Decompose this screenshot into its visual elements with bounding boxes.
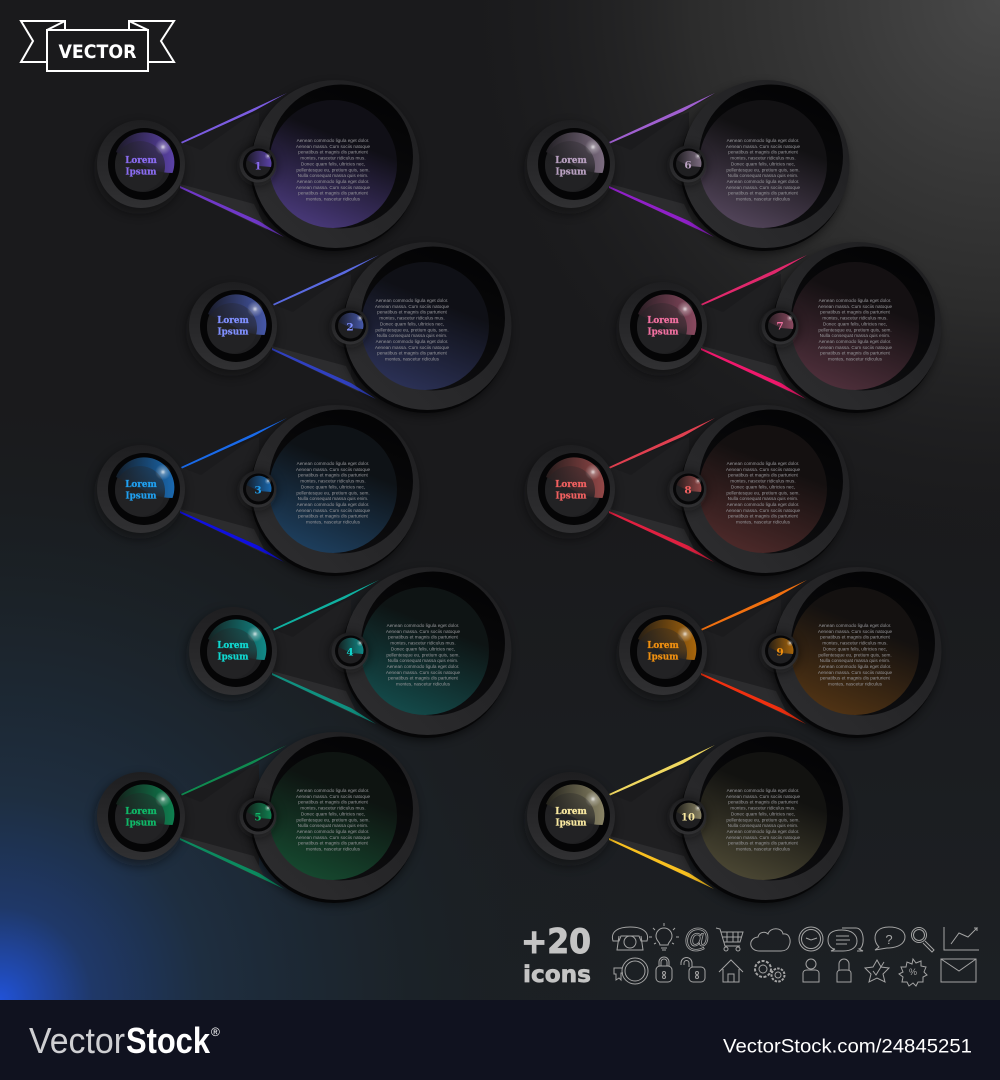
icon: unlocked padlock xyxy=(681,958,705,982)
step 9: orange: montes, nascetur ridiculus xyxy=(828,681,883,686)
step 10: yellow: Aenean massa. Cum sociis natoque xyxy=(726,794,801,799)
step 5: green: Ipsum xyxy=(126,818,157,828)
step 4: teal: 4 xyxy=(346,646,354,658)
icon: chat bubbles xyxy=(828,928,863,951)
step 1: purple: Donec quam felis, ultricies nec, xyxy=(301,161,365,166)
step 1: purple: Ipsum xyxy=(126,168,157,178)
logo: VectorStock: ® xyxy=(211,1025,220,1039)
step 8: red: 8 xyxy=(684,484,692,496)
step 10: yellow: 10 xyxy=(681,812,695,824)
step 7: pink: Aenean commodo ligula eget dolor. xyxy=(819,339,891,344)
step 4: teal: Lorem xyxy=(217,641,249,651)
step 6: violet: Aenean commodo ligula eget dolor. xyxy=(727,138,799,143)
step 10: yellow: Ipsum xyxy=(556,818,587,828)
step 7: pink xyxy=(616,242,942,415)
logo: VectorStock: Stock xyxy=(126,1020,211,1061)
step 1: purple: Aenean massa. Cum sociis natoque xyxy=(296,144,371,149)
step 3: blue: penatibus et magnis dis parturient xyxy=(298,473,369,478)
step 7: pink: montes, nascetur ridiculus mus. xyxy=(822,316,888,321)
step 1: purple: Lorem xyxy=(125,156,157,166)
step 4: teal: Aenean commodo ligula eget dolor. xyxy=(387,623,459,628)
step 7: pink: Lorem xyxy=(647,316,679,326)
step 10: yellow: Aenean massa. Cum sociis natoque xyxy=(726,835,801,840)
step 1: purple: Aenean massa. Cum sociis natoque xyxy=(296,185,371,190)
step 2: periwinkle: penatibus et magnis dis parturient xyxy=(377,351,448,356)
step 6: violet: Aenean commodo ligula eget dolor. xyxy=(727,179,799,184)
icon: cloud xyxy=(751,929,790,951)
step 9: orange xyxy=(616,567,942,740)
step 3: blue: montes, nascetur ridiculus mus. xyxy=(300,479,366,484)
step 2: periwinkle xyxy=(186,242,512,415)
step 6: violet xyxy=(524,80,850,253)
step 10: yellow: montes, nascetur ridiculus mus. xyxy=(730,806,796,811)
step 4: teal: montes, nascetur ridiculus xyxy=(396,681,451,686)
step 10: yellow: Nulla consequat massa quis enim. xyxy=(728,823,798,828)
step 2: periwinkle: montes, nascetur ridiculus mus. xyxy=(379,316,445,321)
step 1: purple: Aenean commodo ligula eget dolor. xyxy=(297,138,369,143)
step 9: orange: penatibus et magnis dis parturient xyxy=(820,635,891,640)
step 9: orange: Aenean commodo ligula eget dolor. xyxy=(819,623,891,628)
step 6: violet: Aenean massa. Cum sociis natoque xyxy=(726,144,801,149)
icon: man xyxy=(803,959,819,982)
step 9: orange: Donec quam felis, ultricies nec, xyxy=(823,646,887,651)
step 7: pink: Aenean massa. Cum sociis natoque xyxy=(818,345,893,350)
step 3: blue: pellentesque eu, pretium quis, sem. xyxy=(296,490,370,495)
icon: discount badge xyxy=(899,959,927,986)
step 8: red: Ipsum xyxy=(556,492,587,502)
step 6: violet: Ipsum xyxy=(556,168,587,178)
step 3: blue: Aenean commodo ligula eget dolor. xyxy=(297,502,369,507)
step 7: pink: pellentesque eu, pretium quis, sem. xyxy=(818,327,892,332)
step 8: red: Aenean massa. Cum sociis natoque xyxy=(726,467,801,472)
step 5: green xyxy=(94,732,420,905)
step 9: orange: 9 xyxy=(776,646,784,658)
step 3: blue: Aenean commodo ligula eget dolor. xyxy=(297,461,369,466)
step 3: blue: Aenean massa. Cum sociis natoque xyxy=(296,508,371,513)
icon: shopping cart xyxy=(716,928,743,951)
icon: gears xyxy=(755,961,784,982)
step 6: violet: Nulla consequat massa quis enim. xyxy=(728,173,798,178)
heading: +20 icons xyxy=(521,922,591,988)
step 5: green: pellentesque eu, pretium quis, sem. xyxy=(296,817,370,822)
badge: VECTOR ribbon: VECTOR xyxy=(58,41,137,63)
step 9: orange: penatibus et magnis dis parturient xyxy=(820,676,891,681)
step 1: purple: Nulla consequat massa quis enim. xyxy=(298,173,368,178)
step 7: pink: penatibus et magnis dis parturient xyxy=(820,310,891,315)
step 7: pink: Donec quam felis, ultricies nec, xyxy=(823,321,887,326)
icon: star with tick xyxy=(865,960,889,982)
step 8: red: penatibus et magnis dis parturient xyxy=(728,514,799,519)
step 1: purple: Aenean commodo ligula eget dolor. xyxy=(297,179,369,184)
step 3: blue: 3 xyxy=(254,484,262,496)
step 8: red: montes, nascetur ridiculus mus. xyxy=(730,479,796,484)
step 4: teal: Nulla consequat massa quis enim. xyxy=(388,658,458,663)
icon: light bulb xyxy=(649,923,679,950)
step 8: red: Lorem xyxy=(555,480,587,490)
step 6: violet: penatibus et magnis dis parturient xyxy=(728,150,799,155)
step 9: orange: pellentesque eu, pretium quis, sem. xyxy=(818,652,892,657)
step 10: yellow xyxy=(524,732,850,905)
step 8: red: Donec quam felis, ultricies nec, xyxy=(731,484,795,489)
step 5: green: penatibus et magnis dis parturient xyxy=(298,800,369,805)
step 1: purple: 1 xyxy=(254,160,262,172)
step 5: green: 5 xyxy=(254,812,262,824)
step 8: red: montes, nascetur ridiculus xyxy=(736,519,791,524)
step 2: periwinkle: Aenean commodo ligula eget dolor. xyxy=(376,339,448,344)
step 6: violet: 6 xyxy=(684,160,692,172)
icon: envelope xyxy=(941,959,976,982)
step 9: orange: montes, nascetur ridiculus mus. xyxy=(822,641,888,646)
step 3: blue: montes, nascetur ridiculus xyxy=(306,519,361,524)
step 5: green: Lorem xyxy=(125,807,157,817)
step 6: violet: montes, nascetur ridiculus mus. xyxy=(730,156,796,161)
step 7: pink: Aenean massa. Cum sociis natoque xyxy=(818,304,893,309)
step 2: periwinkle: Aenean massa. Cum sociis natoque xyxy=(375,304,450,309)
step 9: orange: Nulla consequat massa quis enim. xyxy=(820,658,890,663)
step 4: teal: Aenean massa. Cum sociis natoque xyxy=(386,670,461,675)
step 9: orange: Lorem xyxy=(647,641,679,651)
step 9: orange: Aenean massa. Cum sociis natoque xyxy=(818,629,893,634)
step 4: teal: montes, nascetur ridiculus mus. xyxy=(390,641,456,646)
step 3: blue: Ipsum xyxy=(126,492,157,502)
step 10: yellow: Aenean commodo ligula eget dolor. xyxy=(727,829,799,834)
step 6: violet: penatibus et magnis dis parturient xyxy=(728,191,799,196)
step 10: yellow: Lorem xyxy=(555,807,587,817)
step 5: green: Aenean massa. Cum sociis natoque xyxy=(296,835,371,840)
step 1: purple: pellentesque eu, pretium quis, sem. xyxy=(296,167,370,172)
step 4: teal: pellentesque eu, pretium quis, sem. xyxy=(386,652,460,657)
step 2: periwinkle: penatibus et magnis dis parturient xyxy=(377,310,448,315)
step 2: periwinkle: pellentesque eu, pretium quis, sem. xyxy=(375,327,449,332)
step 3: blue: Aenean massa. Cum sociis natoque xyxy=(296,467,371,472)
step 2: periwinkle: Lorem xyxy=(217,316,249,326)
logo: VectorStock xyxy=(29,1020,220,1061)
logo: VectorStock: Vector xyxy=(29,1020,125,1061)
step 8: red xyxy=(524,405,850,578)
step 2: periwinkle: Ipsum xyxy=(218,328,249,338)
step 3: blue: Nulla consequat massa quis enim. xyxy=(298,496,368,501)
icon: line chart xyxy=(944,927,979,950)
step 4: teal: penatibus et magnis dis parturient xyxy=(388,635,459,640)
step 5: green: Aenean commodo ligula eget dolor. xyxy=(297,829,369,834)
step 8: red: pellentesque eu, pretium quis, sem. xyxy=(726,490,800,495)
step 4: teal xyxy=(186,567,512,740)
step 1: purple xyxy=(94,80,420,253)
icon: question bubble xyxy=(875,927,905,950)
heading: +20 icons: +20 xyxy=(521,922,591,962)
step 6: violet: pellentesque eu, pretium quis, sem. xyxy=(726,167,800,172)
step 7: pink: 7 xyxy=(776,320,784,332)
heading: +20 icons: icons xyxy=(523,962,591,988)
icon: magnifier xyxy=(912,928,934,952)
step 7: pink: montes, nascetur ridiculus xyxy=(828,356,883,361)
icon: question bubble: ? xyxy=(885,932,893,947)
step 2: periwinkle: Aenean commodo ligula eget dolor. xyxy=(376,298,448,303)
step 5: green: Aenean massa. Cum sociis natoque xyxy=(296,794,371,799)
step 10: yellow: montes, nascetur ridiculus xyxy=(736,846,791,851)
step 10: yellow: Aenean commodo ligula eget dolor. xyxy=(727,788,799,793)
step 2: periwinkle: 2 xyxy=(346,322,354,334)
step 8: red: Aenean commodo ligula eget dolor. xyxy=(727,461,799,466)
step 6: violet: Lorem xyxy=(555,156,587,166)
step 8: red: Nulla consequat massa quis enim. xyxy=(728,496,798,501)
icon: at sign: @ xyxy=(684,923,710,953)
step 4: teal: Ipsum xyxy=(218,652,249,662)
step 9: orange: Ipsum xyxy=(648,652,679,662)
step 3: blue: Donec quam felis, ultricies nec, xyxy=(301,484,365,489)
step 5: green: montes, nascetur ridiculus mus. xyxy=(300,806,366,811)
step 3: blue xyxy=(94,405,420,578)
step 5: green: penatibus et magnis dis parturient xyxy=(298,841,369,846)
badge: VECTOR ribbon xyxy=(21,21,174,71)
icon set xyxy=(612,923,979,986)
icon: house xyxy=(719,960,743,982)
icon: telephone xyxy=(612,927,648,950)
step 10: yellow: penatibus et magnis dis parturient xyxy=(728,841,799,846)
source url: VectorStock.com/24845251 xyxy=(723,1036,972,1058)
icon: locked padlock xyxy=(656,957,672,982)
step 5: green: Nulla consequat massa quis enim. xyxy=(298,823,368,828)
step 4: teal: penatibus et magnis dis parturient xyxy=(388,676,459,681)
step 4: teal: Donec quam felis, ultricies nec, xyxy=(391,646,455,651)
icon: discount badge: % xyxy=(909,967,917,977)
step 8: red: Aenean commodo ligula eget dolor. xyxy=(727,502,799,507)
step 7: pink: Nulla consequat massa quis enim. xyxy=(820,333,890,338)
step 2: periwinkle: Donec quam felis, ultricies nec, xyxy=(380,321,444,326)
step 9: orange: Aenean commodo ligula eget dolor. xyxy=(819,664,891,669)
step 6: violet: montes, nascetur ridiculus xyxy=(736,196,791,201)
step 10: yellow: Donec quam felis, ultricies nec, xyxy=(731,811,795,816)
step 3: blue: penatibus et magnis dis parturient xyxy=(298,514,369,519)
step 2: periwinkle: Nulla consequat massa quis enim. xyxy=(377,333,447,338)
step 1: purple: montes, nascetur ridiculus mus. xyxy=(300,156,366,161)
step 5: green: Aenean commodo ligula eget dolor. xyxy=(297,788,369,793)
step 1: purple: penatibus et magnis dis parturient xyxy=(298,150,369,155)
step 5: green: montes, nascetur ridiculus xyxy=(306,846,361,851)
icon: clock xyxy=(799,927,823,951)
step 1: purple: penatibus et magnis dis parturient xyxy=(298,191,369,196)
step 7: pink: Ipsum xyxy=(648,328,679,338)
step 2: periwinkle: Aenean massa. Cum sociis natoque xyxy=(375,345,450,350)
step 10: yellow: penatibus et magnis dis parturient xyxy=(728,800,799,805)
step 5: green: Donec quam felis, ultricies nec, xyxy=(301,811,365,816)
step 6: violet: Aenean massa. Cum sociis natoque xyxy=(726,185,801,190)
step 4: teal: Aenean commodo ligula eget dolor. xyxy=(387,664,459,669)
step 4: teal: Aenean massa. Cum sociis natoque xyxy=(386,629,461,634)
icon: key xyxy=(614,958,648,984)
step 7: pink: Aenean commodo ligula eget dolor. xyxy=(819,298,891,303)
step 6: violet: Donec quam felis, ultricies nec, xyxy=(731,161,795,166)
step 8: red: penatibus et magnis dis parturient xyxy=(728,473,799,478)
step 9: orange: Aenean massa. Cum sociis natoque xyxy=(818,670,893,675)
step 7: pink: penatibus et magnis dis parturient xyxy=(820,351,891,356)
step 10: yellow: pellentesque eu, pretium quis, sem. xyxy=(726,817,800,822)
step 1: purple: montes, nascetur ridiculus xyxy=(306,196,361,201)
step 3: blue: Lorem xyxy=(125,480,157,490)
icon: woman xyxy=(837,959,851,982)
footer bar xyxy=(0,1000,1000,1080)
step 2: periwinkle: montes, nascetur ridiculus xyxy=(385,356,440,361)
step 8: red: Aenean massa. Cum sociis natoque xyxy=(726,508,801,513)
